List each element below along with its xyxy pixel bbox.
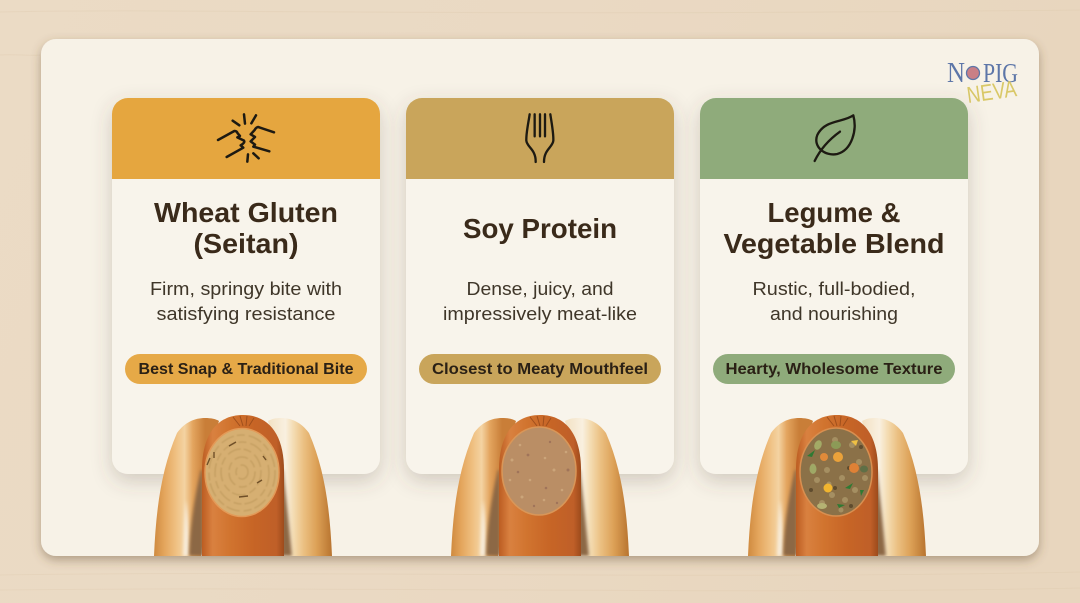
card 1 tag xyxy=(125,354,367,384)
card 1 tag: Best Snap & Traditional Bite xyxy=(138,361,354,378)
card 1 description: satisfying resistance xyxy=(156,304,336,324)
card 2 tag: Closest to Meaty Mouthfeel xyxy=(432,361,648,378)
icon: fist bump xyxy=(218,114,274,162)
card 3 description: Rustic, full-bodied, xyxy=(752,279,916,299)
icon: fork xyxy=(526,114,553,162)
card 1: wheat gluten xyxy=(112,98,380,474)
logo: No Pig Neva: N xyxy=(947,58,965,89)
card 1 description: Firm, springy bite with xyxy=(150,279,342,299)
logo: No Pig Neva xyxy=(947,58,1019,108)
main panel xyxy=(41,39,1039,556)
card 3: legume and vegetable blend xyxy=(700,98,968,474)
card 1 heading: Wheat Gluten xyxy=(154,197,338,228)
card 3 heading: Legume & xyxy=(768,197,900,228)
card 2 tag xyxy=(419,354,661,384)
card 2: soy protein xyxy=(406,98,674,474)
card 3 heading: Vegetable Blend xyxy=(724,228,944,259)
hot dog: seitan cross-section xyxy=(154,415,332,556)
card 3 description: and nourishing xyxy=(770,304,898,324)
logo: No Pig Neva: NEVA xyxy=(965,75,1019,108)
card 3 header xyxy=(700,98,968,179)
card 3 tag xyxy=(713,354,955,384)
card 1 header xyxy=(112,98,380,179)
card 3 tag: Hearty, Wholesome Texture xyxy=(726,361,943,378)
logo: No Pig Neva: PIG xyxy=(983,58,1018,88)
card 1 heading: (Seitan) xyxy=(194,228,298,259)
card 2 header xyxy=(406,98,674,179)
card 2 description: Dense, juicy, and xyxy=(466,279,614,299)
card 2 description: impressively meat-like xyxy=(443,304,637,324)
icon: leaf xyxy=(815,115,855,161)
hot dog: legume and vegetable cross-section xyxy=(748,415,926,556)
card 2 heading: Soy Protein xyxy=(463,213,617,244)
hot dog: soy cross-section xyxy=(451,415,629,556)
